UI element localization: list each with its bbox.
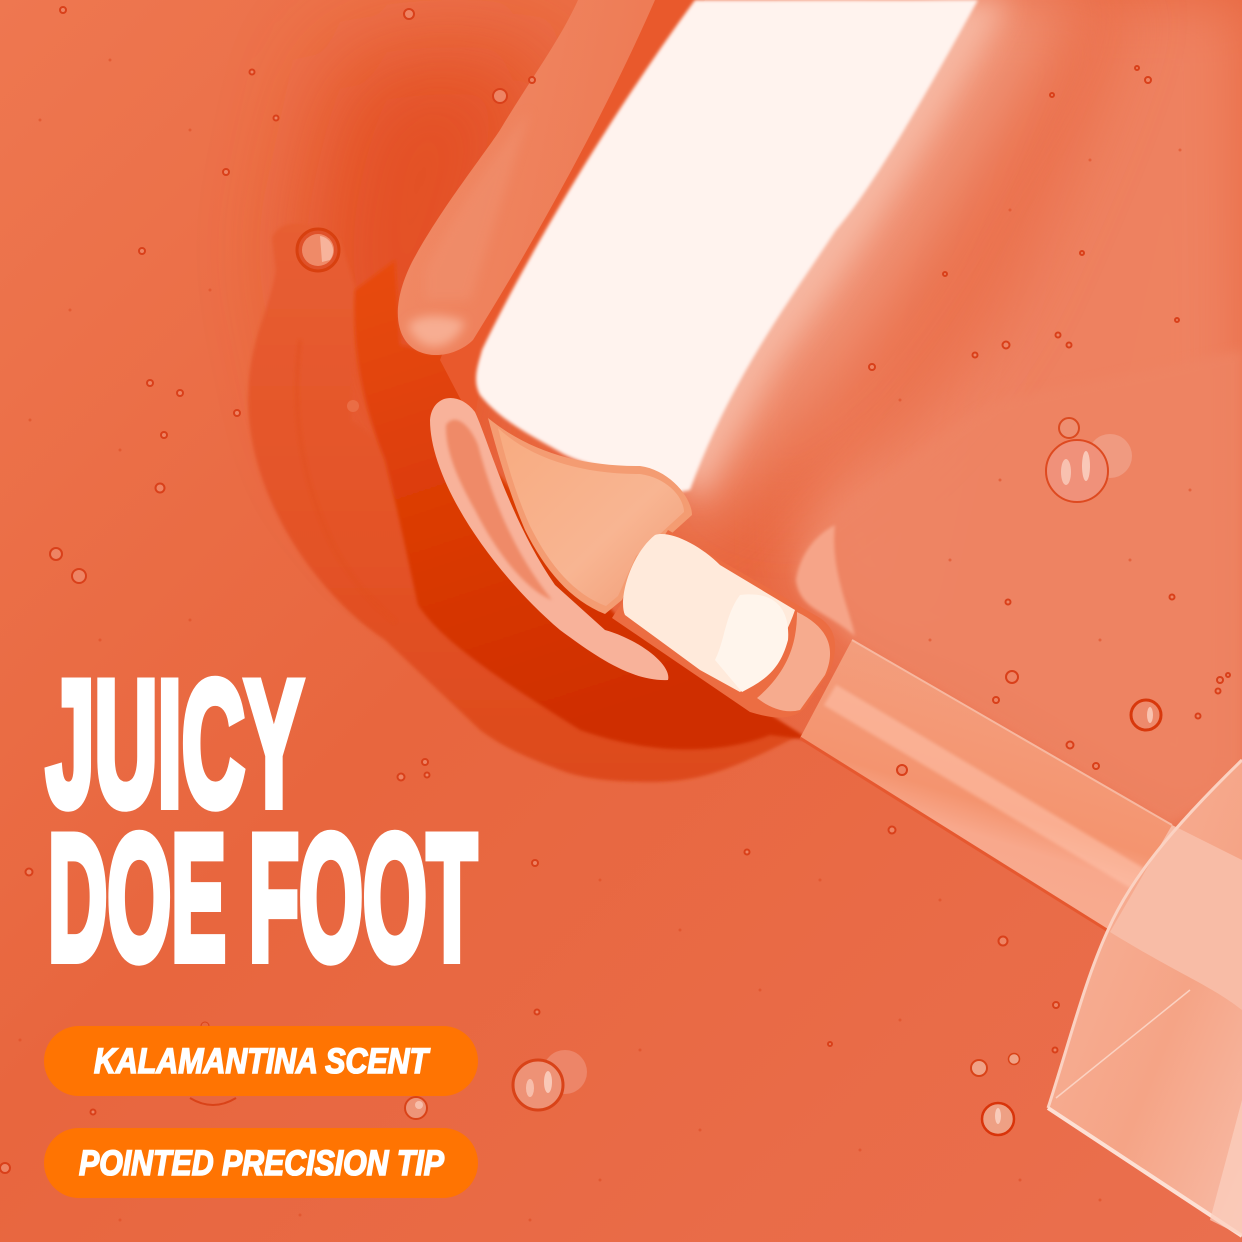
droplet: partly behind pills (190, 1022, 236, 1105)
product smear: white band (476, 0, 978, 492)
pill: Kalamantina scent: KALAMANTINA SCENT (94, 1042, 430, 1081)
soft glow right of white band (660, 0, 1070, 540)
gel: crescent lobe under band (430, 398, 668, 680)
droplet: lower middle (513, 1050, 587, 1110)
title: Juicy Doe Foot: JUICY (46, 644, 303, 843)
gel: edge between strip and white band (440, 0, 705, 425)
product smear: peach sponge tip (488, 418, 692, 614)
droplet: right middle (1131, 700, 1161, 730)
droplet: top pool (297, 229, 339, 271)
droplet: bottom right (971, 1054, 1020, 1135)
gel: right lobe beside tube (795, 350, 1242, 825)
droplet: near pill (405, 1097, 427, 1119)
gel: outer translucent pool (248, 223, 810, 782)
infographic canvas: DOE FOOT (48, 798, 477, 997)
pill: Pointed precision tip: POINTED PRECISION TIP (79, 1144, 445, 1183)
pill: Kalamantina scent (44, 1026, 478, 1096)
pill: Pointed precision tip (44, 1128, 478, 1198)
applicator cap (1048, 760, 1242, 1236)
gel: upper right pale wash (720, 0, 1242, 820)
title: Juicy Doe Foot (46, 644, 477, 997)
droplet: right large (1046, 418, 1132, 502)
gel: dark halo around tube (300, 45, 560, 560)
large droplets (190, 229, 1161, 1135)
gel: strip beside the white band (398, 0, 655, 355)
applicator tip (612, 530, 835, 718)
applicator tube (800, 640, 1172, 932)
